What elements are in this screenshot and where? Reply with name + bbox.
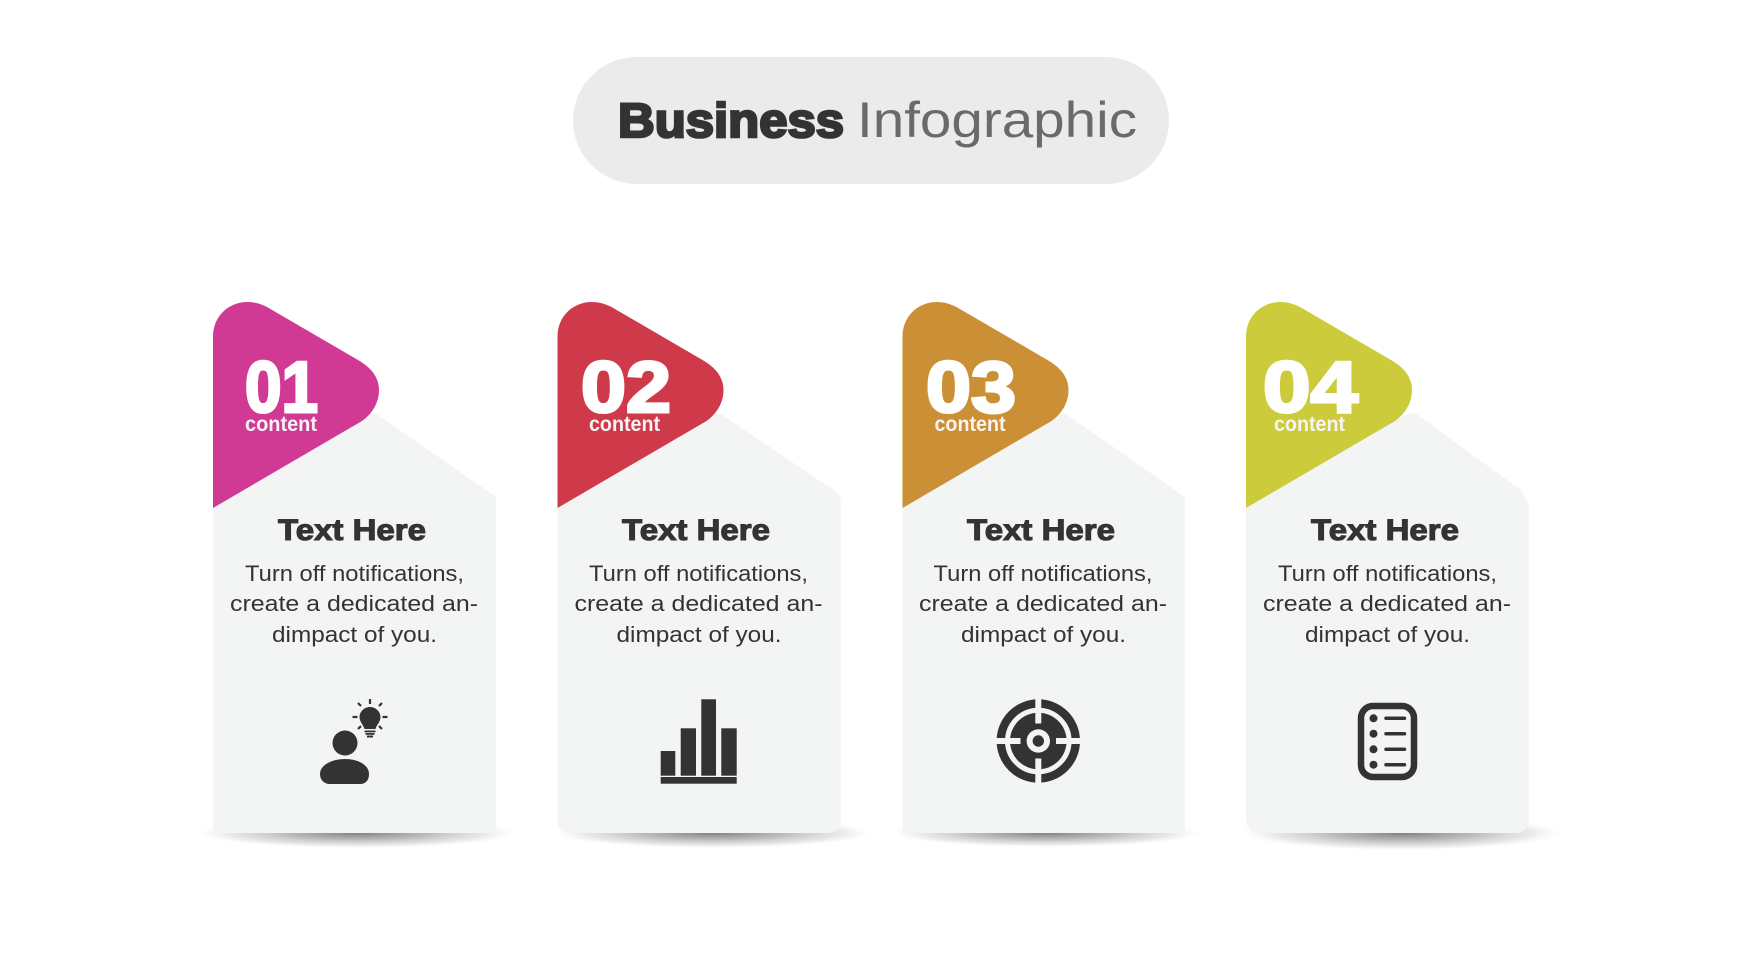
number badge <box>1246 302 1412 508</box>
panel: card 02 <box>555 302 871 848</box>
card description: Turn off notifications, <box>589 561 808 586</box>
panel: card 01 <box>199 302 515 848</box>
card description <box>1263 561 1511 647</box>
title: Business: Business <box>618 95 844 148</box>
shadow glow <box>892 819 1200 847</box>
card description: create a dedicated an- <box>230 591 478 616</box>
card description: Turn off notifications, <box>1278 561 1497 586</box>
title: Infographic: Infographic <box>857 92 1137 148</box>
card heading: Text Here <box>1311 514 1459 547</box>
card description: create a dedicated an- <box>1263 591 1511 616</box>
icon: target <box>994 697 1082 785</box>
card description: dimpact of you. <box>272 622 437 647</box>
card description <box>574 561 822 647</box>
icon: bar chart <box>661 699 737 784</box>
card body <box>213 413 496 833</box>
card description: dimpact of you. <box>1305 622 1470 647</box>
number badge <box>213 302 379 508</box>
number: 01 <box>245 348 318 428</box>
card description: Turn off notifications, <box>245 561 464 586</box>
shadow glow <box>1244 816 1560 850</box>
card heading: Text Here <box>622 514 770 547</box>
card body <box>1246 413 1529 833</box>
card description: dimpact of you. <box>616 622 782 647</box>
card description: dimpact of you. <box>961 622 1126 647</box>
number caption: content <box>589 413 660 436</box>
card body <box>558 413 841 833</box>
number caption: content <box>245 413 317 436</box>
number: 03 <box>926 348 1016 428</box>
number: 04 <box>1263 348 1358 428</box>
number caption: content <box>934 413 1006 436</box>
icon: checklist <box>1361 706 1414 777</box>
card description <box>919 561 1167 647</box>
card description: Turn off notifications, <box>934 561 1152 586</box>
card description: create a dedicated an- <box>919 591 1167 616</box>
panel: card 03 <box>892 302 1200 847</box>
title pill <box>573 57 1169 184</box>
card heading: Text Here <box>278 514 426 547</box>
number badge <box>558 302 724 508</box>
number badge <box>902 302 1068 508</box>
shadow glow <box>199 818 515 848</box>
card heading: Text Here <box>967 514 1115 547</box>
icon: person with light bulb <box>320 699 388 784</box>
card body <box>902 413 1185 833</box>
card description <box>230 561 478 647</box>
number caption: content <box>1274 413 1345 436</box>
number: 02 <box>581 348 671 428</box>
shadow glow <box>555 818 871 848</box>
panel: card 04 <box>1244 302 1560 850</box>
card description: create a dedicated an- <box>574 591 822 616</box>
